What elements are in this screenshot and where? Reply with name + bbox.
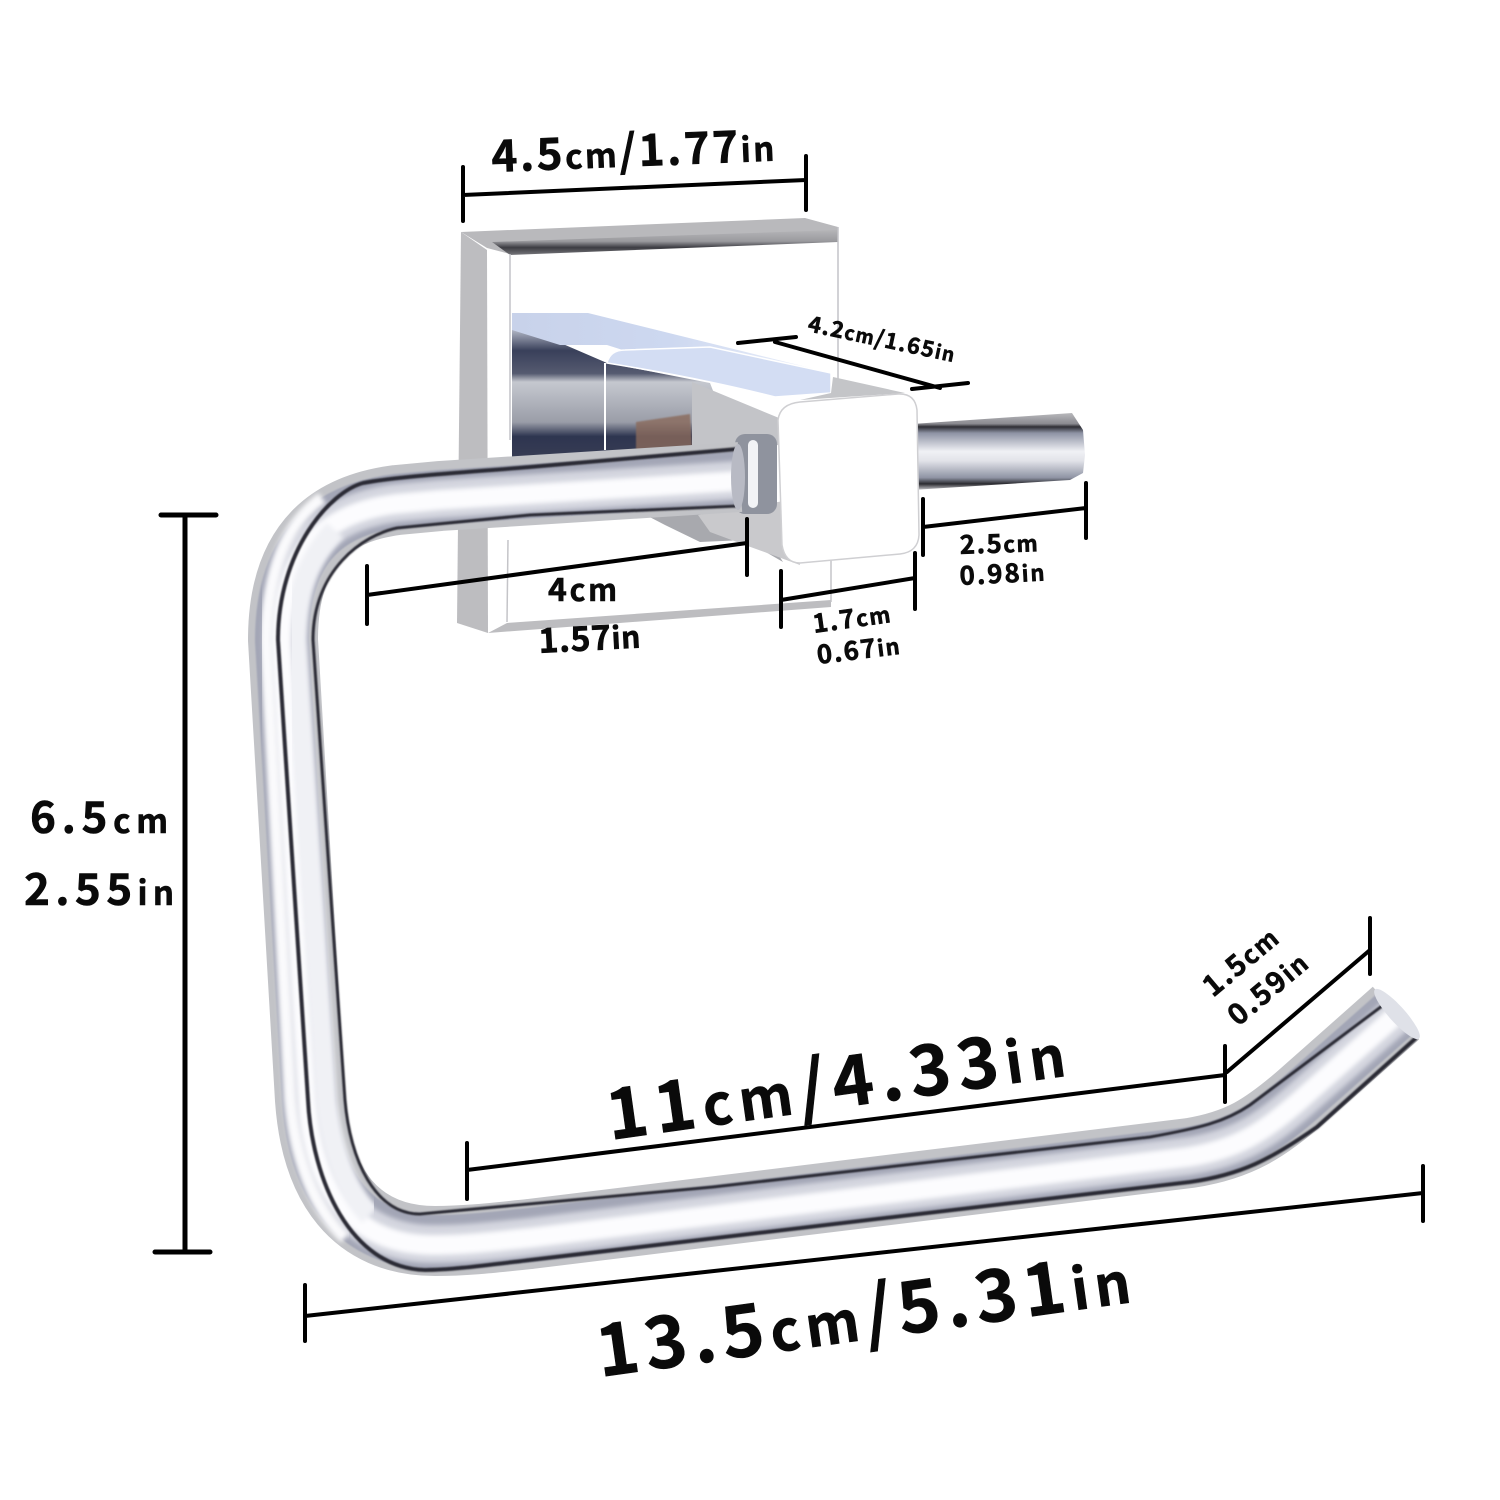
dimension: rail straight length	[467, 996, 1225, 1199]
dimension: height	[24, 515, 216, 1252]
rail end cap	[1369, 984, 1425, 1044]
dimension: plate width: 4.5cm/1.77in	[490, 110, 775, 185]
dimension: arm depth	[738, 307, 968, 389]
dimension: stub length: 2.5cm	[959, 522, 1038, 562]
dimension: block width: 0.67in	[814, 625, 901, 672]
dimension: height: 6.5cm	[30, 782, 168, 846]
arm top face	[512, 313, 831, 397]
chrome paper rail	[266, 449, 1416, 1270]
dimension: stub length	[923, 483, 1086, 593]
dimension: rail tip	[1192, 916, 1370, 1072]
dimension: rail clearance: 4cm	[548, 565, 617, 611]
holder arm and square block	[512, 313, 1085, 565]
outer reflection line	[278, 449, 1416, 1270]
dimension: rail clearance: 1.57in	[537, 609, 641, 663]
square block	[778, 394, 919, 563]
rail front end	[731, 444, 745, 510]
arm side face	[692, 382, 779, 450]
right stub	[912, 413, 1085, 490]
dimension: rail straight length: 11cm/4.33in	[599, 996, 1070, 1161]
dimension: height: 2.55in	[24, 854, 174, 918]
lower wedge	[640, 500, 783, 562]
dimension: total width: 13.5cm/5.31in	[588, 1219, 1136, 1398]
dimension: stub length: 0.98in	[958, 552, 1045, 593]
inner reflection line	[313, 506, 1390, 1214]
dimension: total width	[305, 1166, 1423, 1398]
dimension: rail tip: 1.5cm	[1192, 916, 1286, 1005]
dimension: plate width	[463, 110, 806, 221]
wall mounting plate	[457, 218, 838, 633]
arm underside reflection	[512, 322, 735, 465]
dimension: rail clearance	[367, 519, 747, 663]
dimension: arm depth: 4.2cm/1.65in	[806, 307, 958, 369]
dimension: rail tip: 0.59in	[1217, 941, 1316, 1034]
dimension: block width: 1.7cm	[810, 593, 892, 641]
dimension: block width	[781, 553, 915, 672]
vertical section highlights	[266, 498, 345, 1238]
upper right wedge	[800, 377, 905, 400]
collar	[735, 434, 777, 514]
